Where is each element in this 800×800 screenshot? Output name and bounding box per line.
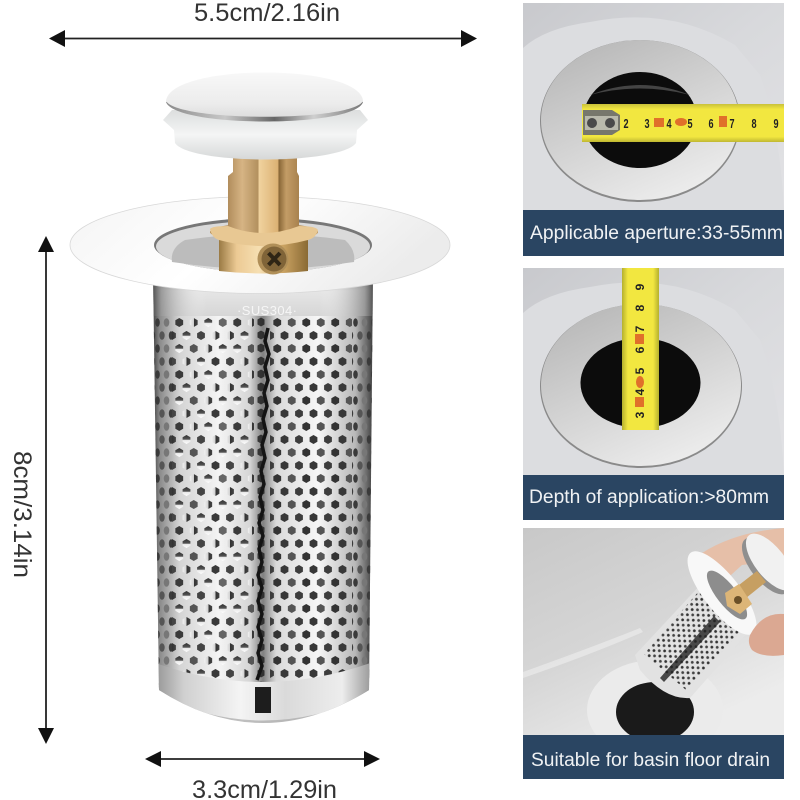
- bottom width dimension: [145, 751, 380, 800]
- measuring tape: 8: [751, 118, 757, 131]
- left label: 8cm/3.14in: [8, 451, 36, 578]
- usage caption: [523, 735, 784, 779]
- bottom arrow: [145, 751, 380, 767]
- panel: basin floor drain: [523, 526, 800, 779]
- flange: [70, 196, 450, 294]
- drain ring: [587, 662, 694, 735]
- vertical measuring tape: 4: [633, 388, 647, 395]
- vertical measuring tape: 7: [633, 325, 647, 332]
- height dimension: [8, 236, 54, 744]
- vertical measuring tape: 9: [633, 283, 647, 290]
- product: strainer: [70, 72, 450, 735]
- measuring tape: 3: [644, 118, 650, 131]
- depth caption: [523, 475, 784, 520]
- vertical measuring tape: 8: [633, 304, 647, 311]
- usage photo: [523, 528, 784, 735]
- held cap: [742, 534, 784, 594]
- measuring tape: [582, 104, 784, 142]
- measuring tape: 5: [687, 118, 693, 131]
- aperture caption: [523, 210, 784, 256]
- panel: aperture: [523, 3, 784, 256]
- screw: [258, 244, 288, 274]
- measuring tape: 6: [708, 118, 714, 131]
- measuring tape: 7: [729, 118, 735, 131]
- top width dimension: [49, 0, 477, 47]
- measuring tape: 2: [623, 118, 629, 131]
- aperture caption: Applicable aperture:33-55mm: [530, 223, 783, 244]
- collar rim: [210, 226, 318, 246]
- top arrow: [49, 30, 477, 47]
- panel: depth: [523, 268, 784, 520]
- vertical measuring tape: [622, 268, 659, 430]
- silicone seal: [163, 110, 368, 160]
- pop-up stem: [228, 158, 299, 234]
- depth caption: Depth of application:>80mm: [529, 487, 769, 508]
- depth photo: [523, 268, 784, 475]
- perforated basket: [150, 270, 376, 735]
- usage caption: Suitable for basin floor drain: [531, 750, 770, 771]
- aperture photo: [523, 3, 784, 210]
- held strainer: [635, 542, 768, 698]
- chrome cap: [166, 72, 363, 122]
- lower hand: [749, 614, 784, 656]
- vertical measuring tape: 5: [633, 367, 647, 374]
- measuring tape: 9: [773, 118, 779, 131]
- vertical measuring tape: 3: [633, 411, 647, 418]
- vertical measuring tape: 6: [633, 346, 647, 353]
- measuring tape: 4: [666, 118, 672, 131]
- left arrow: [38, 236, 54, 744]
- upper hand: [702, 528, 784, 576]
- engraved mark: ·SUS304·: [237, 303, 297, 318]
- brass collar with screw: [210, 158, 318, 274]
